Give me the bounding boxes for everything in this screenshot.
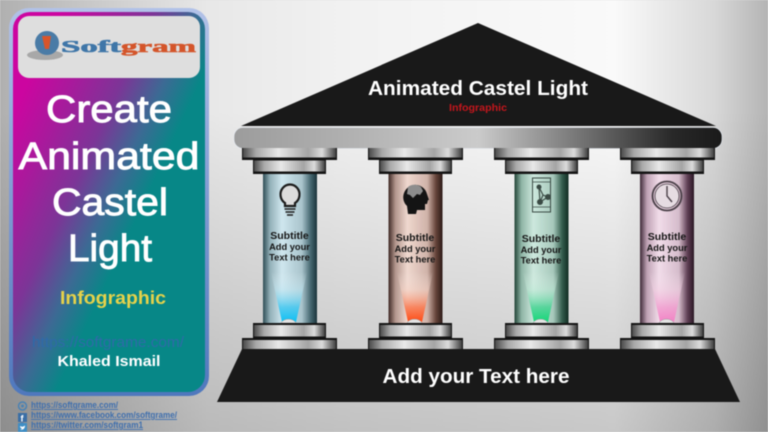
icon: twitter (18, 423, 27, 432)
roof (241, 23, 716, 126)
icon: head with brain (403, 185, 429, 214)
entablature beam (234, 128, 722, 148)
capital (494, 148, 589, 174)
lamp (533, 319, 548, 323)
link: facebook: https://www.facebook.com/softgrame/ (31, 410, 177, 420)
icon: clock (652, 182, 682, 210)
base (494, 323, 589, 349)
lamp (281, 319, 296, 323)
column 2: red (368, 148, 463, 349)
light beam (523, 272, 559, 322)
logo: Softgram: gram (121, 37, 196, 56)
author name: Khaled Ismail (58, 353, 160, 370)
capital (242, 148, 337, 174)
light beam (397, 272, 433, 322)
link text: https://softgrame.com/ (32, 334, 185, 351)
heading: Create Animated Castel Light: Animated (18, 136, 200, 178)
text: Text here (521, 256, 561, 266)
base (242, 323, 337, 349)
text: Add your (395, 244, 436, 254)
icon: facebook: f (20, 414, 24, 424)
text: Add your (269, 242, 310, 252)
text (647, 231, 688, 264)
text: Text here (269, 252, 310, 262)
roof title: Animated Castel Light (368, 78, 588, 100)
light beam (271, 272, 307, 322)
icon: light bulb (280, 184, 300, 215)
capital (368, 148, 463, 174)
social links (18, 400, 177, 432)
text: Text here (395, 254, 435, 264)
icon: facebook (18, 413, 27, 424)
base (620, 323, 715, 349)
subheading: Infographic: Infographic (60, 288, 166, 308)
link: twitter: https://twitter.com/softgram1 (31, 420, 143, 430)
icon: web (18, 402, 26, 410)
panel: title sidebar (9, 8, 209, 396)
text: Text here (647, 254, 687, 264)
lamp (407, 319, 422, 323)
column 4: pink (620, 148, 715, 349)
shaft (640, 174, 694, 323)
text: Subtitle (648, 231, 686, 243)
light beam (649, 272, 685, 322)
lamp (659, 319, 674, 323)
shaft (514, 174, 568, 323)
logo: Softgram (18, 16, 200, 78)
shaft (263, 174, 317, 323)
text: Subtitle (522, 233, 560, 245)
text: Add your (521, 245, 562, 255)
text (269, 230, 310, 262)
heading: Create Animated Castel Light (18, 89, 200, 270)
roof subtitle: Infographic (449, 103, 507, 114)
text: Subtitle (270, 230, 309, 242)
pedestal text: Add your Text here (382, 366, 570, 388)
text: Subtitle (396, 232, 434, 244)
text (395, 232, 436, 264)
shaft (388, 174, 442, 323)
icon: phone with network (532, 178, 550, 212)
heading: Create Animated Castel Light: Create (46, 89, 172, 131)
column 3: green (494, 148, 589, 349)
capital (620, 148, 715, 174)
heading: Create Animated Castel Light: Light (68, 228, 152, 270)
logo: Softgram: Soft (61, 37, 122, 56)
pedestal (217, 349, 740, 402)
column 1: blue (242, 148, 337, 349)
text: Add your (647, 243, 688, 253)
base (368, 323, 463, 349)
link: website: https://softgrame.com/ (31, 400, 118, 410)
heading: Create Animated Castel Light: Castel (52, 182, 168, 224)
text (521, 233, 562, 266)
